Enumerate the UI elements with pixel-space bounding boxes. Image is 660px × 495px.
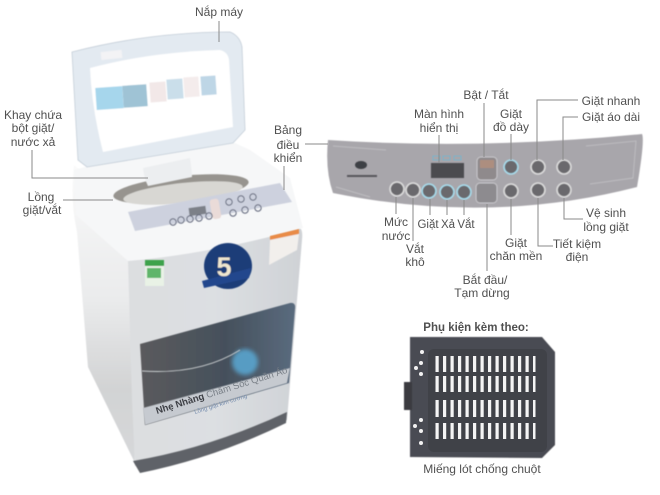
leader: long clothes wash xyxy=(563,117,578,160)
round buttons xyxy=(390,160,571,199)
label: wash: Giặt xyxy=(417,219,439,231)
leader: power xyxy=(483,103,485,157)
label: control panel: Bảng xyxy=(274,123,302,137)
energy label xyxy=(145,260,164,286)
label: drum clean: lồng giặt xyxy=(583,220,629,234)
washing machine xyxy=(72,32,303,473)
machine top xyxy=(74,143,303,261)
leader: drum xyxy=(63,199,113,201)
drum xyxy=(112,169,250,209)
leader: heavy wash xyxy=(510,134,512,160)
label: rodent guard: Miếng lót chống chuột xyxy=(423,462,541,476)
label: rinse: Xả xyxy=(441,219,456,231)
label: long clothes wash: Giặt áo dài xyxy=(582,110,640,124)
leader: detergent tray xyxy=(32,150,148,178)
front graphic: Nhẹ Nhàng Chăm Sóc Quần Áo xyxy=(155,365,289,417)
open lid xyxy=(72,32,245,167)
label: display: Màn hình xyxy=(414,107,464,121)
leader: water level xyxy=(395,197,397,214)
machine front xyxy=(128,228,302,466)
label: start pause: Tạm dừng xyxy=(454,286,510,300)
leader: wash xyxy=(429,199,431,215)
label: control panel: điều xyxy=(277,138,299,152)
leader: drum clean xyxy=(564,198,583,219)
leader: display xyxy=(438,135,440,163)
leader: rinse xyxy=(446,200,448,215)
label: start pause: Bắt đầu/ xyxy=(463,272,508,287)
label: energy saving: Tiết kiệm xyxy=(553,237,601,251)
label: detergent tray: Khay chứa xyxy=(4,108,62,122)
centre buttons xyxy=(476,157,497,203)
label: dry spin: Vắt xyxy=(406,241,425,256)
front graphic xyxy=(140,303,295,425)
label: blanket wash: chăn mền xyxy=(490,249,542,263)
control panel closeup xyxy=(327,134,643,208)
leader: blanket wash xyxy=(510,199,512,235)
label: heavy wash: đồ dày xyxy=(493,120,529,134)
label: accessories heading: Phụ kiện kèm theo: xyxy=(423,322,529,334)
label: spin: Vắt xyxy=(457,218,475,231)
front graphic: Lồng giặt kim cương xyxy=(194,394,248,416)
label: blanket wash: Giặt xyxy=(505,236,528,250)
label: dry spin: khô xyxy=(405,255,425,269)
label: detergent tray: bột giặt/ xyxy=(12,121,55,135)
label: water level: nước xyxy=(382,229,410,243)
label: quick wash: Giặt nhanh xyxy=(582,94,640,108)
label: lid: Nắp máy xyxy=(195,4,243,19)
leader: control panel xyxy=(284,144,328,190)
leader: dry spin xyxy=(412,198,414,241)
tray mounting holes xyxy=(413,350,424,445)
accessory tray xyxy=(404,337,555,458)
warranty badge: 5 xyxy=(216,252,232,282)
warranty badge xyxy=(202,243,252,289)
machine base xyxy=(133,412,287,473)
display xyxy=(431,163,464,178)
machine side xyxy=(73,165,145,463)
label: drum: giặt/vắt xyxy=(23,202,62,217)
label: drum clean: Vệ sinh xyxy=(586,206,626,220)
warning sticker xyxy=(269,229,299,265)
leader: lid xyxy=(218,21,220,42)
brand logo xyxy=(347,161,377,177)
leader: spin xyxy=(463,200,465,215)
label: energy saving: điện xyxy=(566,250,588,264)
machine control panel xyxy=(128,183,292,231)
leader: start pause xyxy=(486,204,488,271)
tray slots xyxy=(436,356,536,439)
label: drum: Lồng xyxy=(28,190,54,204)
label: control panel: khiển xyxy=(274,151,302,165)
leader: energy saving xyxy=(538,198,553,246)
detergent drawer xyxy=(143,158,192,186)
label: power: Bật / Tắt xyxy=(463,87,509,102)
label: water level: Mức xyxy=(384,215,408,229)
leader: quick wash xyxy=(537,100,578,160)
label: heavy wash: Giặt xyxy=(500,107,523,121)
label: detergent tray: nước xả xyxy=(11,135,56,149)
label: display: hiển thị xyxy=(420,121,458,135)
indicator icons xyxy=(433,156,461,160)
